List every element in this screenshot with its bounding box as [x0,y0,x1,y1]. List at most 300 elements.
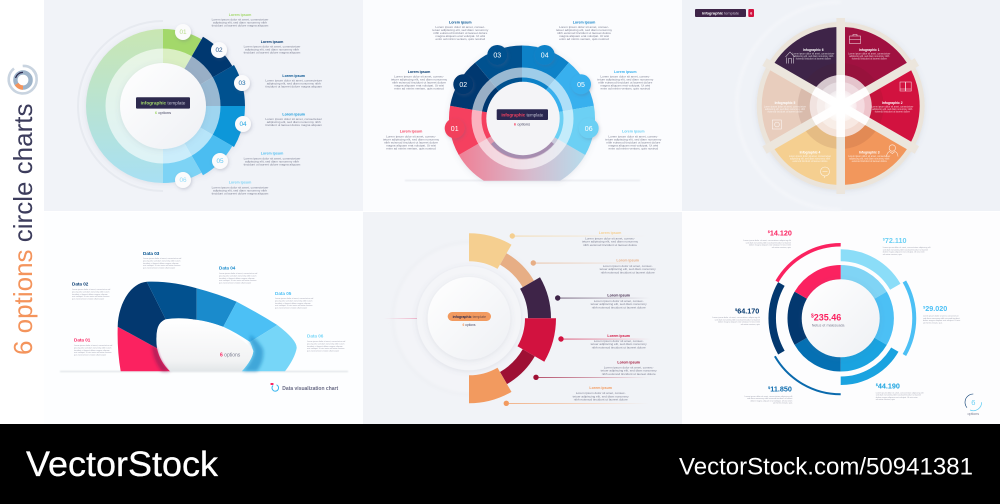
footer url: VectorStock.com/50941381 [679,454,973,480]
leader 3 [555,295,650,301]
sector text 6: euismod tincidunt ut laoreet dolore [796,58,832,61]
data 02 text: ipiscing elit, sed diam nonummy nibh euism [72,290,110,293]
text block 02: nibh euismod tincidunt ut laoreet dolore [392,81,446,85]
value 64.170: dolore magna aliquam erat volutpat. Ut wisi enim [718,321,760,324]
text block 6: nibh euismod tincidunt ut laoreet dolore [574,398,628,402]
data 01 text [74,338,112,357]
text block 01: magna aliquam erat volutpat. Ut wisi [386,144,436,148]
arc chart segments [118,282,297,371]
text block 1 [582,231,638,247]
data 02 text: quis nostrud exerci tation ullamcorper [72,298,105,301]
donut chart with stepped sectors [86,29,245,183]
text block 5: tetuer adipiscing elit, sed diam nonummy [601,369,657,373]
badge: 6 [750,11,752,15]
leader 2 [531,260,646,266]
sector text 3 [848,150,891,163]
text block 5: Lorem ipsum dolor sit amet, consec- [604,365,654,369]
badge [695,9,754,17]
number badges: 05 [216,158,224,165]
text block 6: Lorem ipsum dolor sit amet, consec- [576,391,626,395]
text block 04: tetuer adipiscing elit, sed diam nonummy [556,28,612,32]
text block 2: Lorem ipsum [616,258,639,262]
text block 4: nibh euismod tincidunt ut laoreet dolore [592,346,646,350]
number badges: 04 [239,121,247,128]
value 14.120: dolore magna aliquam erat volutpat. Ut wisi enim [749,244,791,247]
sector text 5: Lorem ipsum dolor sit amet, consectetuer [764,106,806,108]
value 72.110: 72.110 [885,236,907,245]
center label: 6 options [463,323,476,327]
center label [448,312,491,327]
leader 4 [558,336,651,342]
data 01 text: erat volutpat. Ut wisi enim ad minim veniam [74,351,112,354]
floor shadow [405,180,640,181]
text block 4: tetuer adipiscing elit, sed diam nonummy [591,342,647,346]
center disc [802,279,880,357]
text block 01: Lorem ipsum [400,130,422,134]
text block 02: Lorem ipsum [408,70,430,74]
value 64.170: sed diam nonummy nibh euismod tincidunt ut laoreet [715,318,760,321]
data 03 text: ipiscing elit, sed diam nonummy nibh euism [143,259,181,262]
text block 05: tetuer adipiscing elit, sed diam nonummy [597,78,654,82]
data 05 text: ipiscing elit, sed diam nonummy nibh euism [275,299,313,302]
number badges [445,45,599,138]
text block 05: adipiscing elit, sed diam nonummy nibh [245,160,299,164]
sector text 1: euismod tincidunt ut laoreet dolore [852,58,888,61]
text block 04 [556,20,612,41]
data 03 text: Data 03 [143,251,160,256]
center label: 6 options [155,110,171,115]
text block 05: tincidunt ut laoreet dolore magna aliquam [244,163,301,167]
sector text 1 [848,48,891,61]
text block 03: adipiscing elit, sed diam nonummy nibh [267,82,321,86]
caption: Data visualization chart [282,386,338,392]
data 03 text: quis nostrud exerci tation ullamcorper [143,267,176,270]
sector text 4: Infographic 4 [800,150,821,154]
icon: 6 options badge: options [968,412,979,416]
center disc [486,82,560,155]
text block 5 [601,360,657,376]
sector text 3: Infographic 3 [859,150,880,154]
sector text 5: Infographic 5 [775,101,796,105]
value 72.110: dolore magna aliquam erat volutpat. Ut wisi enim [883,251,925,254]
text block 06: magna aliquam erat volutpat. Ut wisi [608,144,659,148]
center value: $ [811,314,814,320]
text block 1: tetuer adipiscing elit, sed diam nonummy [582,240,638,244]
value 14.120: $ [768,229,771,234]
text block 04: Lorem ipsum [282,113,305,117]
value 44.190 [876,381,924,401]
value 29.020 [923,304,961,324]
sector text 1: Lorem ipsum dolor sit amet, consectetuer [848,52,891,56]
icon: safe [772,120,781,129]
number badges: 05 [577,82,585,89]
number badges: 03 [493,52,501,60]
sector text 4 [789,150,831,163]
text block 03 [432,20,489,41]
text block 04: adipiscing elit, sed diam nonummy nibh [267,120,321,124]
value 64.170: Lorem ipsum dolor sit amet, consectetuer adipiscing elit [712,316,760,319]
panel: burgundy and peach pie chart [682,0,1000,211]
text block 04: enim ad minim veniam, quis nostrud [559,37,609,41]
value 72.110: ad minim veniam, quis [883,254,902,256]
number badges: 04 [541,52,549,60]
text block 1: nibh euismod tincidunt ut laoreet dolore [583,243,637,247]
text block 02: magna aliquam erat volutpat. Ut wisi [394,84,444,88]
text block 01 [212,13,269,28]
inner ring [795,272,887,364]
text block 01: nibh euismod tincidunt ut laoreet dolore [384,141,438,145]
leader 5 [533,375,650,380]
sector text 5: adipiscing elit, sed diam nonummy nibh [765,108,806,111]
sector text 2: Lorem ipsum dolor sit amet, consectetuer [871,106,914,108]
value 64.170: ad minim veniam, quis [741,324,760,326]
lower inner band [491,118,554,159]
data 03 text: erat volutpat. Ut wisi enim ad minim veniam [143,264,181,267]
data 01 text: Lorem ipsum dolor sit amet, consectetuer ad [74,344,112,347]
text block 4 [591,334,647,350]
value 44.190: sed diam nonummy nibh euismod tincidunt ut laoreet [876,394,922,397]
data 05 text: Data 05 [275,291,292,296]
text block 04: Lorem ipsum dolor sit amet, consectetuer [265,117,322,121]
panel: irregular blue arc chart [44,212,363,424]
value 14.120: ad minim veniam, quis [772,247,791,249]
ring segments [469,233,556,403]
value 44.190: ad minim veniam, quis [876,399,895,401]
data 04 text: tincidunt ut laoreet dolore magna aliquam [219,277,255,280]
text block 3: Lorem ipsum dolor sit amet, consec- [594,299,644,303]
inner translucent ring [106,48,220,164]
data 04 text: Data 04 [219,266,236,271]
data 05 text: quis nostrud exerci tation ullamcorper [275,307,308,310]
text block 3: Lorem ipsum [607,294,630,298]
number badges: 06 [179,177,187,184]
data 04 text: erat volutpat. Ut wisi enim ad minim veniam [219,279,257,282]
leader 1 [510,233,647,239]
text block 01: tetuer adipiscing elit, sed diam nonummy [383,138,439,142]
icon: 6 options badge: 6 [971,398,975,407]
data 06 text: quis nostrud exerci tation ullamcorper [307,350,340,353]
text block 06: Lorem ipsum dolor sit amet, consectetuer [212,186,268,190]
sector text 4: Lorem ipsum dolor sit amet, consectetuer [789,155,831,158]
text block 02: Lorem ipsum dolor sit amet, consec- [394,75,444,79]
text block 06: Lorem ipsum [622,130,645,134]
text block 06: enim ad minim veniam, quis nostrud [609,147,658,151]
outer pale arc [737,2,841,210]
text block 01 [383,130,439,151]
text block 06: Lorem ipsum [229,181,251,185]
value 29.020: sed diam nonummy nibh euismod tincidunt [923,317,960,320]
text block 06: Lorem ipsum dolor sit amet, consec- [608,135,658,139]
text block 01: tincidunt ut laoreet dolore magna aliquam [212,24,269,28]
sector text 6 [792,48,835,61]
sector text 3: euismod tincidunt ut laoreet dolore [852,160,888,163]
data 06 text [307,334,345,353]
number badges [175,24,251,188]
data 01 text: quis nostrud exerci tation ullamcorper [74,354,107,357]
data 05 text [275,291,313,310]
pie sectors [762,27,920,185]
number badges: 03 [238,80,246,87]
center label [497,109,548,127]
text block 06: tincidunt ut laoreet dolore magna aliquam [212,192,269,196]
sector text 2: euismod tincidunt ut laoreet dolore [875,111,911,114]
text block 05: Lorem ipsum dolor sit amet, consectetuer [244,157,300,161]
text block 06: adipiscing elit, sed diam nonummy nibh [213,189,267,193]
center label: 6 options [514,122,530,127]
text block 05 [244,152,301,167]
value 64.170: 64.170 [737,306,759,315]
data 06 text: erat volutpat. Ut wisi enim ad minim veniam [307,347,345,350]
text block 03: Lorem ipsum dolor sit amet, consec- [435,25,485,29]
text block 01: Lorem ipsum dolor sit amet, consec- [386,135,436,139]
footer bar [0,424,1000,504]
data 06 text: ipiscing elit, sed diam nonummy nibh euism [307,342,345,345]
sector text 6: Lorem ipsum dolor sit amet, consectetuer [792,52,835,56]
sector text 1: Infographic 1 [859,48,880,52]
data 04 text [219,266,257,285]
text block 3: nibh euismod tincidunt ut laoreet dolore [592,305,646,309]
options label: 6 options [220,352,241,358]
value 64.170 [712,306,760,326]
text block 3 [591,294,647,309]
value 29.020: 29.020 [925,304,947,313]
value 11.850: sed diam nonummy nibh euismod tincidunt ut laoreet [747,397,793,400]
text block 06: tetuer adipiscing elit, sed diam nonummy [605,138,662,142]
data 03 text: Lorem ipsum dolor sit amet, consectetuer ad [143,257,181,260]
text block 2: Lorem ipsum dolor sit amet, consec- [603,264,653,268]
value 44.190: $ [876,382,879,387]
data 01 text: tincidunt ut laoreet dolore magna aliquam [74,349,110,352]
text block 3: tetuer adipiscing elit, sed diam nonummy [591,302,647,306]
icon: person [886,145,898,156]
panel: red and blue semi circle chart [363,0,682,211]
text block 1: Lorem ipsum [599,231,621,235]
center value: Netus et malesuada [812,323,845,327]
text block 05: nibh euismod tincidunt ut laoreet dolore [598,81,653,85]
value 29.020: $ [923,304,926,310]
text block 2: tetuer adipiscing elit, sed diam nonummy [600,267,656,271]
icon: briefcase [850,34,860,44]
value 72.110: Lorem ipsum dolor sit amet, consectetuer adipiscing elit [883,246,931,249]
text block 05: Lorem ipsum dolor sit amet, consec- [600,75,650,79]
text block 02: tincidunt ut laoreet dolore magna aliquam [244,51,301,55]
value 72.110 [883,236,931,256]
text block 02 [391,70,447,91]
text block 05: magna aliquam erat volutpat. Ut wisi [600,84,651,88]
panel: green to blue circle chart [44,0,363,211]
sector text 5 [764,101,806,114]
outer arcs [772,245,914,394]
data 02 text [72,282,110,301]
data 03 text [143,251,181,270]
value 64.170: $ [735,307,738,312]
center label: infographic template [501,112,544,117]
value 14.120: 14.120 [770,228,792,237]
text block 01: enim ad minim veniam, quis nostrud [386,147,436,151]
text block 03: Lorem ipsum [449,20,472,24]
value 44.190: dolore magna aliquam erat volutpat. Ut wisi enim [876,396,918,399]
text block 6: Lorem ipsum [589,386,612,390]
text block 01: Lorem ipsum dolor sit amet, consectetuer [212,18,268,22]
center shape [157,319,253,371]
value 29.020: dolore magna aliquam erat volutpat. Ut wisi [923,319,961,322]
faint outer ring [393,242,545,394]
number badges: 02 [459,82,467,89]
leader 6 [504,401,649,406]
sector text 6: adipiscing elit, sed diam nonummy nibh [793,55,834,58]
sector text 6: Infographic 6 [803,48,824,52]
translucent ring [476,72,568,164]
icon: concentric circle logo [9,66,37,93]
text block 02: tetuer adipiscing elit, sed diam nonummy [391,78,447,82]
value 11.850: ad minim veniam, quis [773,403,792,405]
center value [811,312,845,327]
center label: infographic template [141,100,186,106]
text block 03: tincidunt ut laoreet dolore magna aliquam [265,85,322,89]
text block 02: Lorem ipsum dolor sit amet, consectetuer [244,45,300,49]
data 01 text: Data 01 [74,338,91,343]
number badges: 01 [179,29,187,36]
text block 05: Lorem ipsum [261,152,283,156]
text block 04: tincidunt ut laoreet dolore magna aliquam [265,123,322,127]
sector text 3: Lorem ipsum dolor sit amet, consectetuer [848,155,891,158]
center label: infographic template [453,315,486,319]
data 03 text: tincidunt ut laoreet dolore magna aliquam [143,262,179,265]
number badges: 02 [215,47,223,54]
sector text 4: adipiscing elit, sed diam nonummy nibh [790,158,831,160]
panel: stepped ring segment chart [363,212,682,424]
text block 05: Lorem ipsum [614,70,637,74]
value 11.850: $ [768,385,771,390]
center label [136,97,190,115]
shaded ring around hub [798,63,884,149]
sector text 2: adipiscing elit, sed diam nonummy nibh [872,108,913,111]
text block 06 [605,130,662,151]
disc inner [428,277,510,360]
sector text 3: adipiscing elit, sed diam nonummy nibh [849,158,890,160]
text block 06: nibh euismod tincidunt ut laoreet dolore [606,141,661,145]
sector text 5: euismod tincidunt ut laoreet dolore [767,111,803,114]
text block 02: Lorem ipsum [261,40,283,44]
text block 05: enim ad minim veniam, quis nostrud [601,87,650,91]
spokes [764,18,917,194]
value 11.850 [745,385,793,405]
text block 02: enim ad minim veniam, quis nostrud [394,87,444,91]
value 44.190: Lorem ipsum dolor sit amet, consectetuer adipiscing elit [876,391,924,394]
data 05 text: Lorem ipsum dolor sit amet, consectetuer ad [275,297,313,300]
sector text 2 [871,101,914,114]
text block 1: Lorem ipsum dolor sit amet, consec- [585,236,635,240]
text block 04: nibh euismod tincidunt ut laoreet dolore [557,31,611,35]
value 29.020: Lorem ipsum dolor sit amet, consectetuer [923,315,959,318]
icon: hands and house [786,52,794,64]
badge: infographic template [702,10,739,15]
left connector line [384,317,430,320]
disc outer [417,266,521,370]
text block 04: magna aliquam erat volutpat. Ut wisi [559,34,609,38]
faint outer arc [78,21,163,191]
data 06 text: Data 06 [307,334,324,339]
text block 04 [265,113,322,127]
value 11.850: Lorem ipsum dolor sit amet, consectetuer adipiscing elit [745,395,793,398]
center disc [120,63,206,149]
data 05 text: tincidunt ut laoreet dolore magna aliquam [275,302,311,305]
icon: book [900,82,911,91]
text block 01: Lorem ipsum [229,13,251,17]
value 11.850: dolore magna aliquam erat volutpat. Ut wisi enim [750,399,793,402]
text block 03 [265,74,322,89]
panel: concentric financial ring chart [682,212,1000,424]
text block 03: Lorem ipsum dolor sit amet, consectetuer [265,79,322,83]
value 14.120 [743,228,792,249]
data 04 text: ipiscing elit, sed diam nonummy nibh euism [219,274,257,277]
text block 4: Lorem ipsum dolor sit amet, consec- [594,339,644,343]
text block 03: tetuer adipiscing elit, sed diam nonummy [432,28,489,32]
text block 5: Lorem ipsum [617,360,640,364]
circular chart sectors [449,46,595,181]
text block 03: nibh euismod tincidunt ut laoreet dolore [433,31,488,35]
value 14.120: Lorem ipsum dolor sit amet, consectetuer adipiscing elit [743,239,791,242]
text block 03: magna aliquam erat volutpat. Ut wisi [435,34,486,38]
icon: chat bubble [820,167,830,178]
center value: 235.46 [814,312,841,322]
value 72.110: $ [883,236,886,241]
side title text: 6 options circle charts [8,104,38,355]
data 04 text: Lorem ipsum dolor sit amet, consectetuer ad [219,272,257,275]
text block 5: nibh euismod tincidunt ut laoreet dolore [602,372,656,376]
text block 4: Lorem ipsum [607,334,630,338]
data 06 text: tincidunt ut laoreet dolore magna aliquam [307,345,343,348]
number badges: 01 [451,126,459,133]
text block 01: adipiscing elit, sed diam nonummy nibh [213,21,267,25]
text block 05 [597,70,654,91]
text block 06 [212,181,269,196]
data 04 text: quis nostrud exerci tation ullamcorper [219,282,252,285]
data 05 text: erat volutpat. Ut wisi enim ad minim veniam [275,304,313,307]
side title: 6 options circle charts [8,66,38,355]
data 02 text: erat volutpat. Ut wisi enim ad minim veniam [72,295,110,298]
text block 02 [244,40,301,55]
value 29.020: ad minim veniam, quis [923,322,942,324]
text block 04: Lorem ipsum dolor sit amet, consec- [559,25,609,29]
data 02 text: Lorem ipsum dolor sit amet, consectetuer ad [72,288,110,291]
data 02 text: Data 02 [72,282,89,287]
value 14.120: sed diam nonummy nibh euismod tincidunt ut laoreet [746,241,791,244]
text block 03: enim ad minim veniam, quis nostrud [436,37,485,41]
value 44.190: 44.190 [878,381,900,390]
icon: data visualization chart logo [270,383,279,391]
data 02 text: tincidunt ut laoreet dolore magna aliquam [72,293,108,296]
value 72.110: sed diam nonummy nibh euismod tincidunt ut laoreet [883,248,929,251]
data 01 text: ipiscing elit, sed diam nonummy nibh euism [74,346,112,349]
icon: 6 options badge [965,394,982,416]
text block 2: nibh euismod tincidunt ut laoreet dolore [601,270,655,274]
text block 03: Lorem ipsum [282,74,305,78]
floor shadow [60,371,348,372]
sector text 4: euismod tincidunt ut laoreet dolore [792,160,828,163]
beige base disc [757,22,925,190]
data 06 text: Lorem ipsum dolor sit amet, consectetuer ad [307,340,345,343]
text block 02: adipiscing elit, sed diam nonummy nibh [245,48,299,52]
center hub [810,75,872,137]
sector text 2: Infographic 2 [882,101,903,105]
footer brand: VectorStock [26,445,219,484]
number badges: 06 [585,126,593,133]
inner shadows [152,345,170,371]
text block 2 [600,258,656,274]
text block 04: Lorem ipsum [573,20,595,24]
value 11.850: 11.850 [770,385,792,394]
